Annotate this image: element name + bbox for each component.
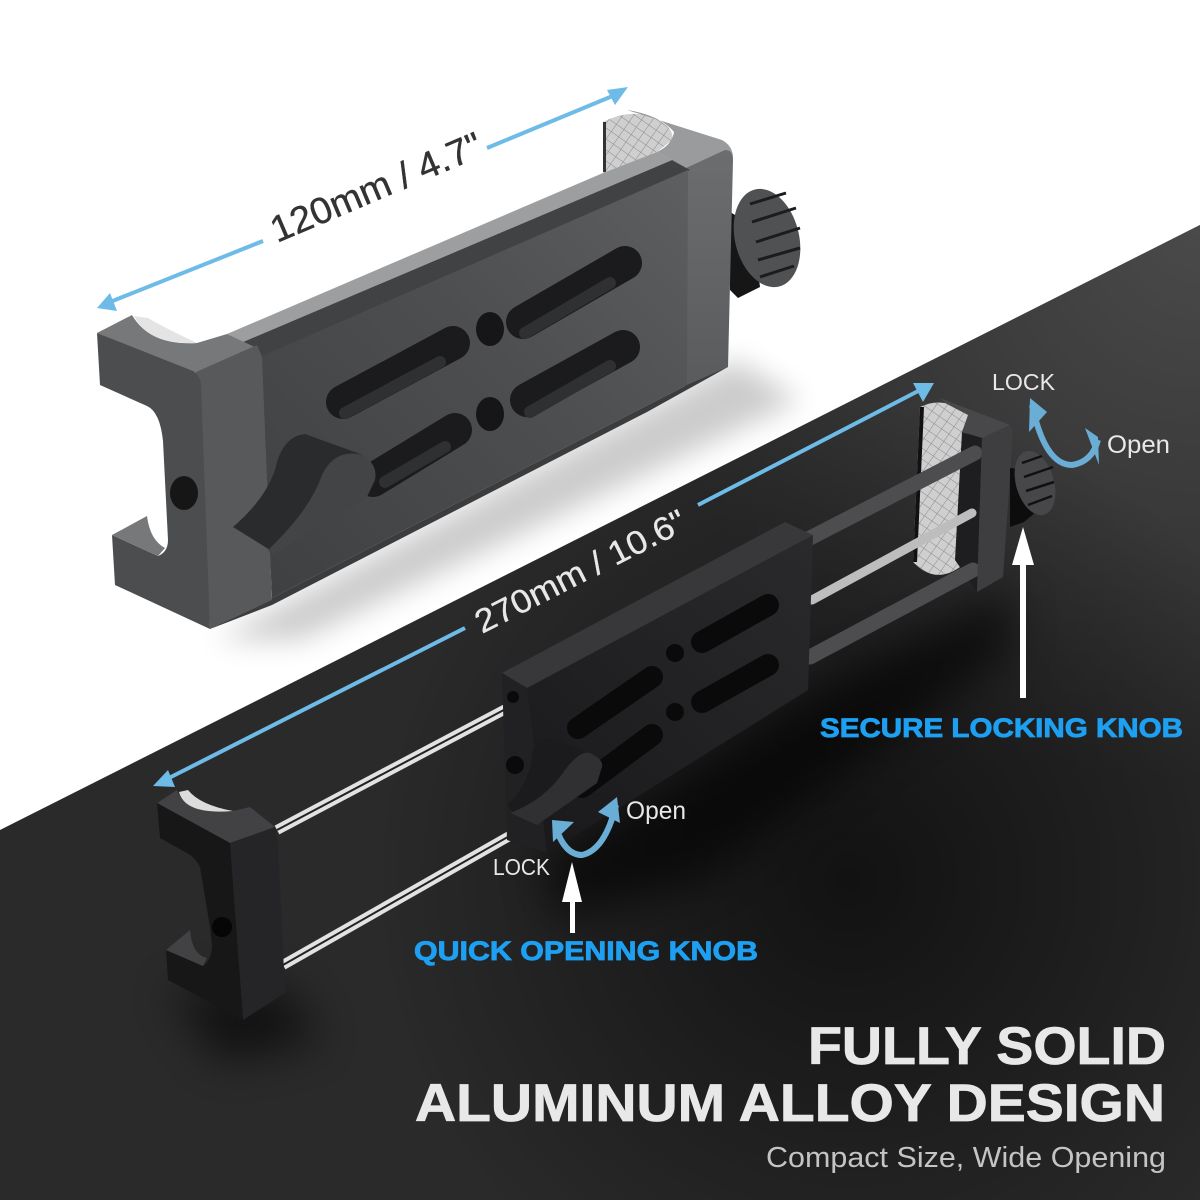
white arrow to locking knob: [1012, 527, 1034, 698]
center plate holes: [506, 644, 684, 774]
label: Open (lever): Open: [626, 797, 686, 825]
center plate slots: [578, 605, 768, 787]
left end side face: [230, 827, 285, 1020]
dimension arrow: 270mm: [153, 383, 934, 787]
bottom product: extended holder: [157, 398, 1062, 1020]
foot top surface: [166, 930, 207, 966]
white arrow to quick knob: [562, 862, 582, 933]
guide rods, upper section: [810, 453, 975, 657]
slots: [343, 263, 625, 482]
soft shadow: bottom product: [170, 590, 1010, 1060]
title: ALUMINUM ALLOY DESIGN: [415, 1074, 1165, 1133]
lower guide rods: [277, 703, 520, 965]
knurled pad, right: [913, 402, 968, 575]
left end front face: [97, 333, 210, 629]
quick lever: [233, 434, 376, 555]
lock/open rotation arrow, right knob: [1029, 398, 1099, 465]
left end side face: [196, 345, 272, 629]
label: LOCK (top): LOCK: [992, 369, 1056, 395]
side thread hole: [170, 476, 198, 510]
quick lever: [507, 738, 602, 825]
threaded holes: [476, 312, 504, 431]
title: FULLY SOLID: [808, 1017, 1166, 1076]
label: secure locking knob: SECURE LOCKING KNOB: [820, 713, 1183, 743]
label: 270mm / 10.6": 270mm / 10.6": [468, 502, 692, 640]
right end inner face: [955, 432, 982, 592]
subtitle: Compact Size, Wide Opening: [766, 1142, 1166, 1174]
label: quick opening knob: QUICK OPENING KNOB: [414, 936, 758, 966]
center plate side: [502, 673, 547, 853]
label: LOCK (lever): LOCK: [493, 854, 551, 880]
cradle pad sliver: [134, 316, 197, 343]
center plate bevel: [502, 522, 813, 688]
side thread hole: [212, 917, 232, 937]
foot top surface: [112, 516, 165, 556]
right end top surface: [940, 398, 1010, 438]
right end block: [685, 150, 733, 387]
dimension arrow: 120mm: [97, 87, 628, 311]
main plate top bevel: [227, 152, 690, 357]
left end top surface: [157, 790, 275, 843]
center plate: [527, 535, 813, 853]
left end front face: [157, 803, 243, 1020]
right end top surface: [627, 110, 733, 170]
cradle pad sliver: [179, 790, 233, 812]
soft shadow: top product: [215, 360, 800, 640]
label: Open (top): Open: [1107, 431, 1170, 459]
main plate face: [260, 170, 688, 598]
knurled pad, right end: [603, 114, 672, 173]
plate bottom silhouette: [210, 367, 728, 629]
knob, right: [1008, 446, 1062, 527]
left end top surface: [97, 315, 257, 376]
top product: compact holder: [97, 110, 810, 629]
lock/open rotation arrow, lever: [552, 797, 620, 855]
title: [415, 1017, 1166, 1133]
label: 120mm / 4.7": 120mm / 4.7": [264, 124, 488, 250]
knob, right: [724, 182, 810, 298]
right end outer face: [977, 425, 1013, 592]
